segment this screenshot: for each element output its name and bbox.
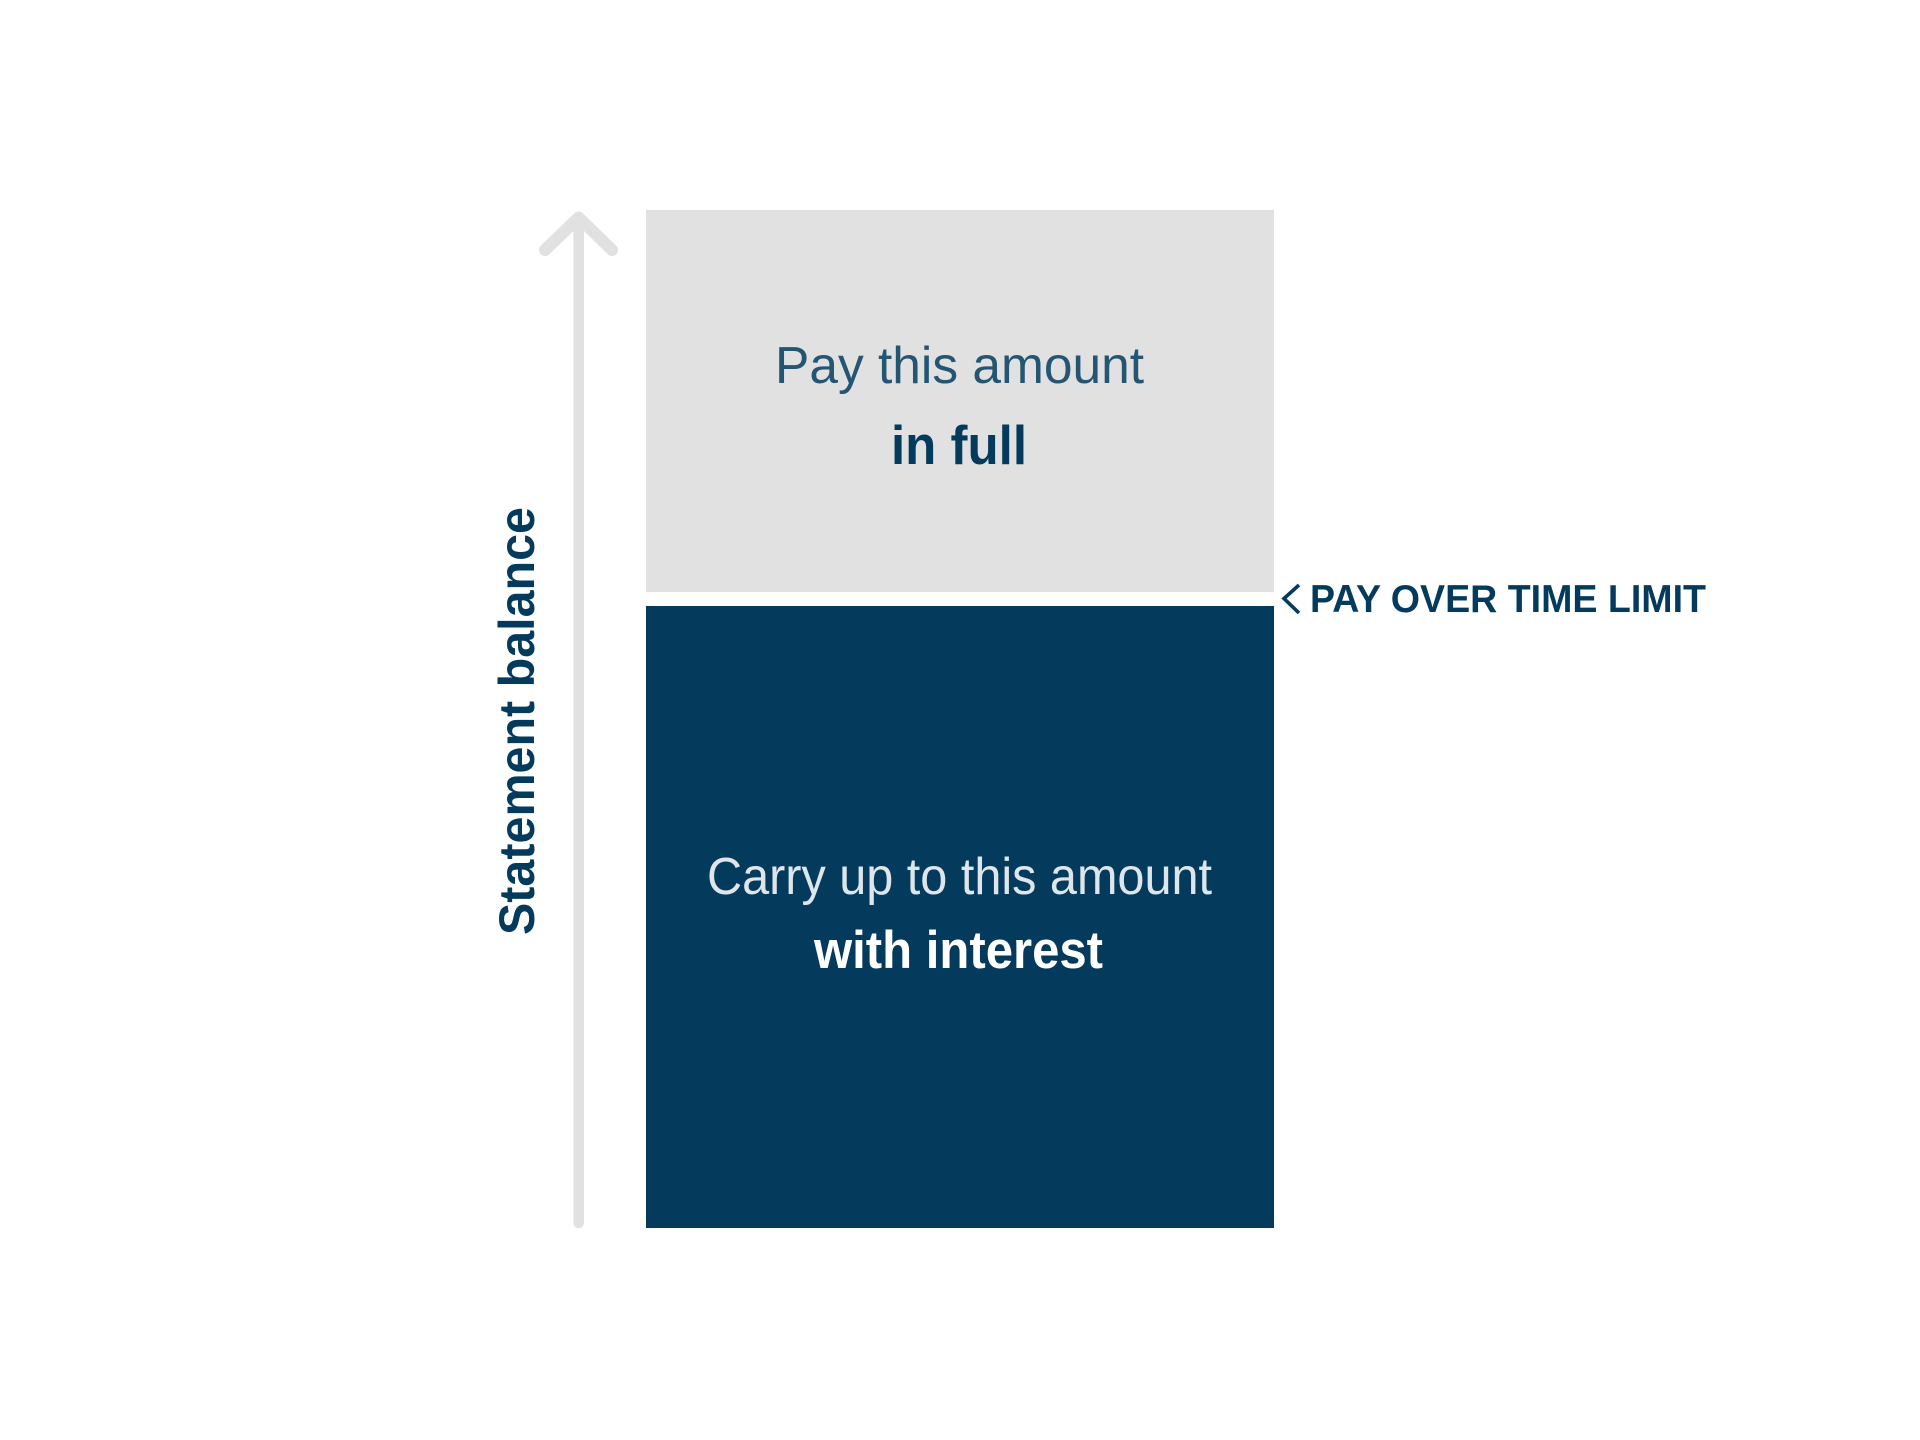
- callout: pay over time limit: [1284, 578, 1706, 621]
- icon: chevron pointing left: [1284, 585, 1299, 613]
- panel: pay in full: [646, 210, 1274, 592]
- label: pay over time limit: PAY OVER TIME LIMIT: [1310, 578, 1706, 621]
- text: carry up to this amount: Carry up to this amount: [707, 848, 1213, 906]
- arrow: statement balance axis: [545, 218, 612, 1223]
- text: pay this amount: Pay this amount: [775, 337, 1145, 395]
- text: in full: in full: [891, 414, 1027, 476]
- axis label: statement balance: Statement balance: [489, 507, 545, 935]
- panel: carry with interest: [646, 606, 1274, 1228]
- text: with interest: with interest: [813, 921, 1103, 980]
